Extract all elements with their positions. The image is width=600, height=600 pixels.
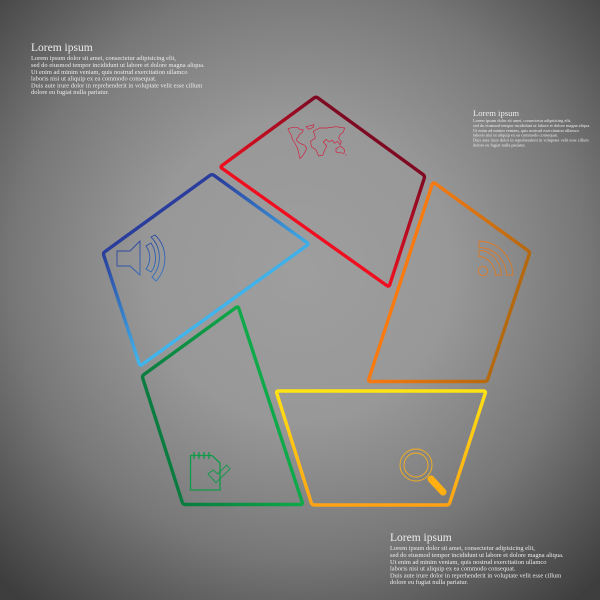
text block: top left: Ut enim ad minim veniam, quis nostrud exercitation ullamco <box>31 69 187 76</box>
icon: rss <box>478 241 513 276</box>
text block: bottom right: Ut enim ad minim veniam, quis nostrud exercitation ullamco <box>390 559 546 566</box>
panel: red segment <box>221 97 424 286</box>
panel: green segment <box>143 307 302 504</box>
text block: top right: Lorem ipsum dolor sit amet, consectetur adipisicing elit, <box>473 118 571 124</box>
text block: bottom right: Lorem ipsum dolor sit amet, consectetur adipisicing elit, <box>390 545 535 552</box>
text block: bottom right: Duis aute irure dolor in reprehenderit in voluptate velit esse cillum <box>390 572 561 579</box>
icon: world map <box>288 125 347 159</box>
text block: top right: laboris nisi ut aliquip ex ea commodo consequat. <box>473 133 558 138</box>
text block: top right <box>473 108 590 148</box>
panel: blue segment <box>104 175 308 365</box>
icon: magnifier <box>400 449 443 492</box>
text block: bottom right: sed do eiusmod tempor incididunt ut labore et dolore magna aliqua. <box>390 552 564 559</box>
icon: notepad with check <box>190 452 230 490</box>
text block: top left: Lorem ipsum <box>31 42 93 54</box>
text block: bottom right: dolore eu fugiat nulla pariatur. <box>390 579 468 586</box>
icon: speaker <box>117 235 165 281</box>
text block: bottom right: Lorem ipsum <box>390 532 452 544</box>
panel: yellow segment <box>277 391 485 505</box>
text block: bottom right: laboris nisi ut aliquip ex ea commodo consequat. <box>390 566 516 573</box>
text block: bottom right <box>390 532 564 586</box>
text block: top left: sed do eiusmod tempor incididunt ut labore et dolore magna aliqua. <box>31 62 205 69</box>
text block: top right: sed do eiusmod tempor incididunt ut labore et dolore magna aliqua. <box>473 123 590 128</box>
text block: top left: dolore eu fugiat nulla pariatur. <box>31 89 109 96</box>
panel: orange segment <box>369 183 529 382</box>
text block: top left <box>31 42 205 96</box>
text block: top left: Duis aute irure dolor in reprehenderit in voluptate velit esse cillum <box>31 82 202 89</box>
text block: top right: dolore eu fugiat nulla pariatur. <box>473 142 526 148</box>
text block: top left: laboris nisi ut aliquip ex ea commodo consequat. <box>31 76 157 83</box>
text block: top right: Duis aute irure dolor in reprehenderit in voluptate velit esse cillum <box>473 138 589 143</box>
text block: top right: Ut enim ad minim veniam, quis nostrud exercitation ullamco <box>473 128 579 134</box>
text block: top left: Lorem ipsum dolor sit amet, consectetur adipisicing elit, <box>31 55 176 62</box>
text block: top right: Lorem ipsum <box>473 108 519 118</box>
